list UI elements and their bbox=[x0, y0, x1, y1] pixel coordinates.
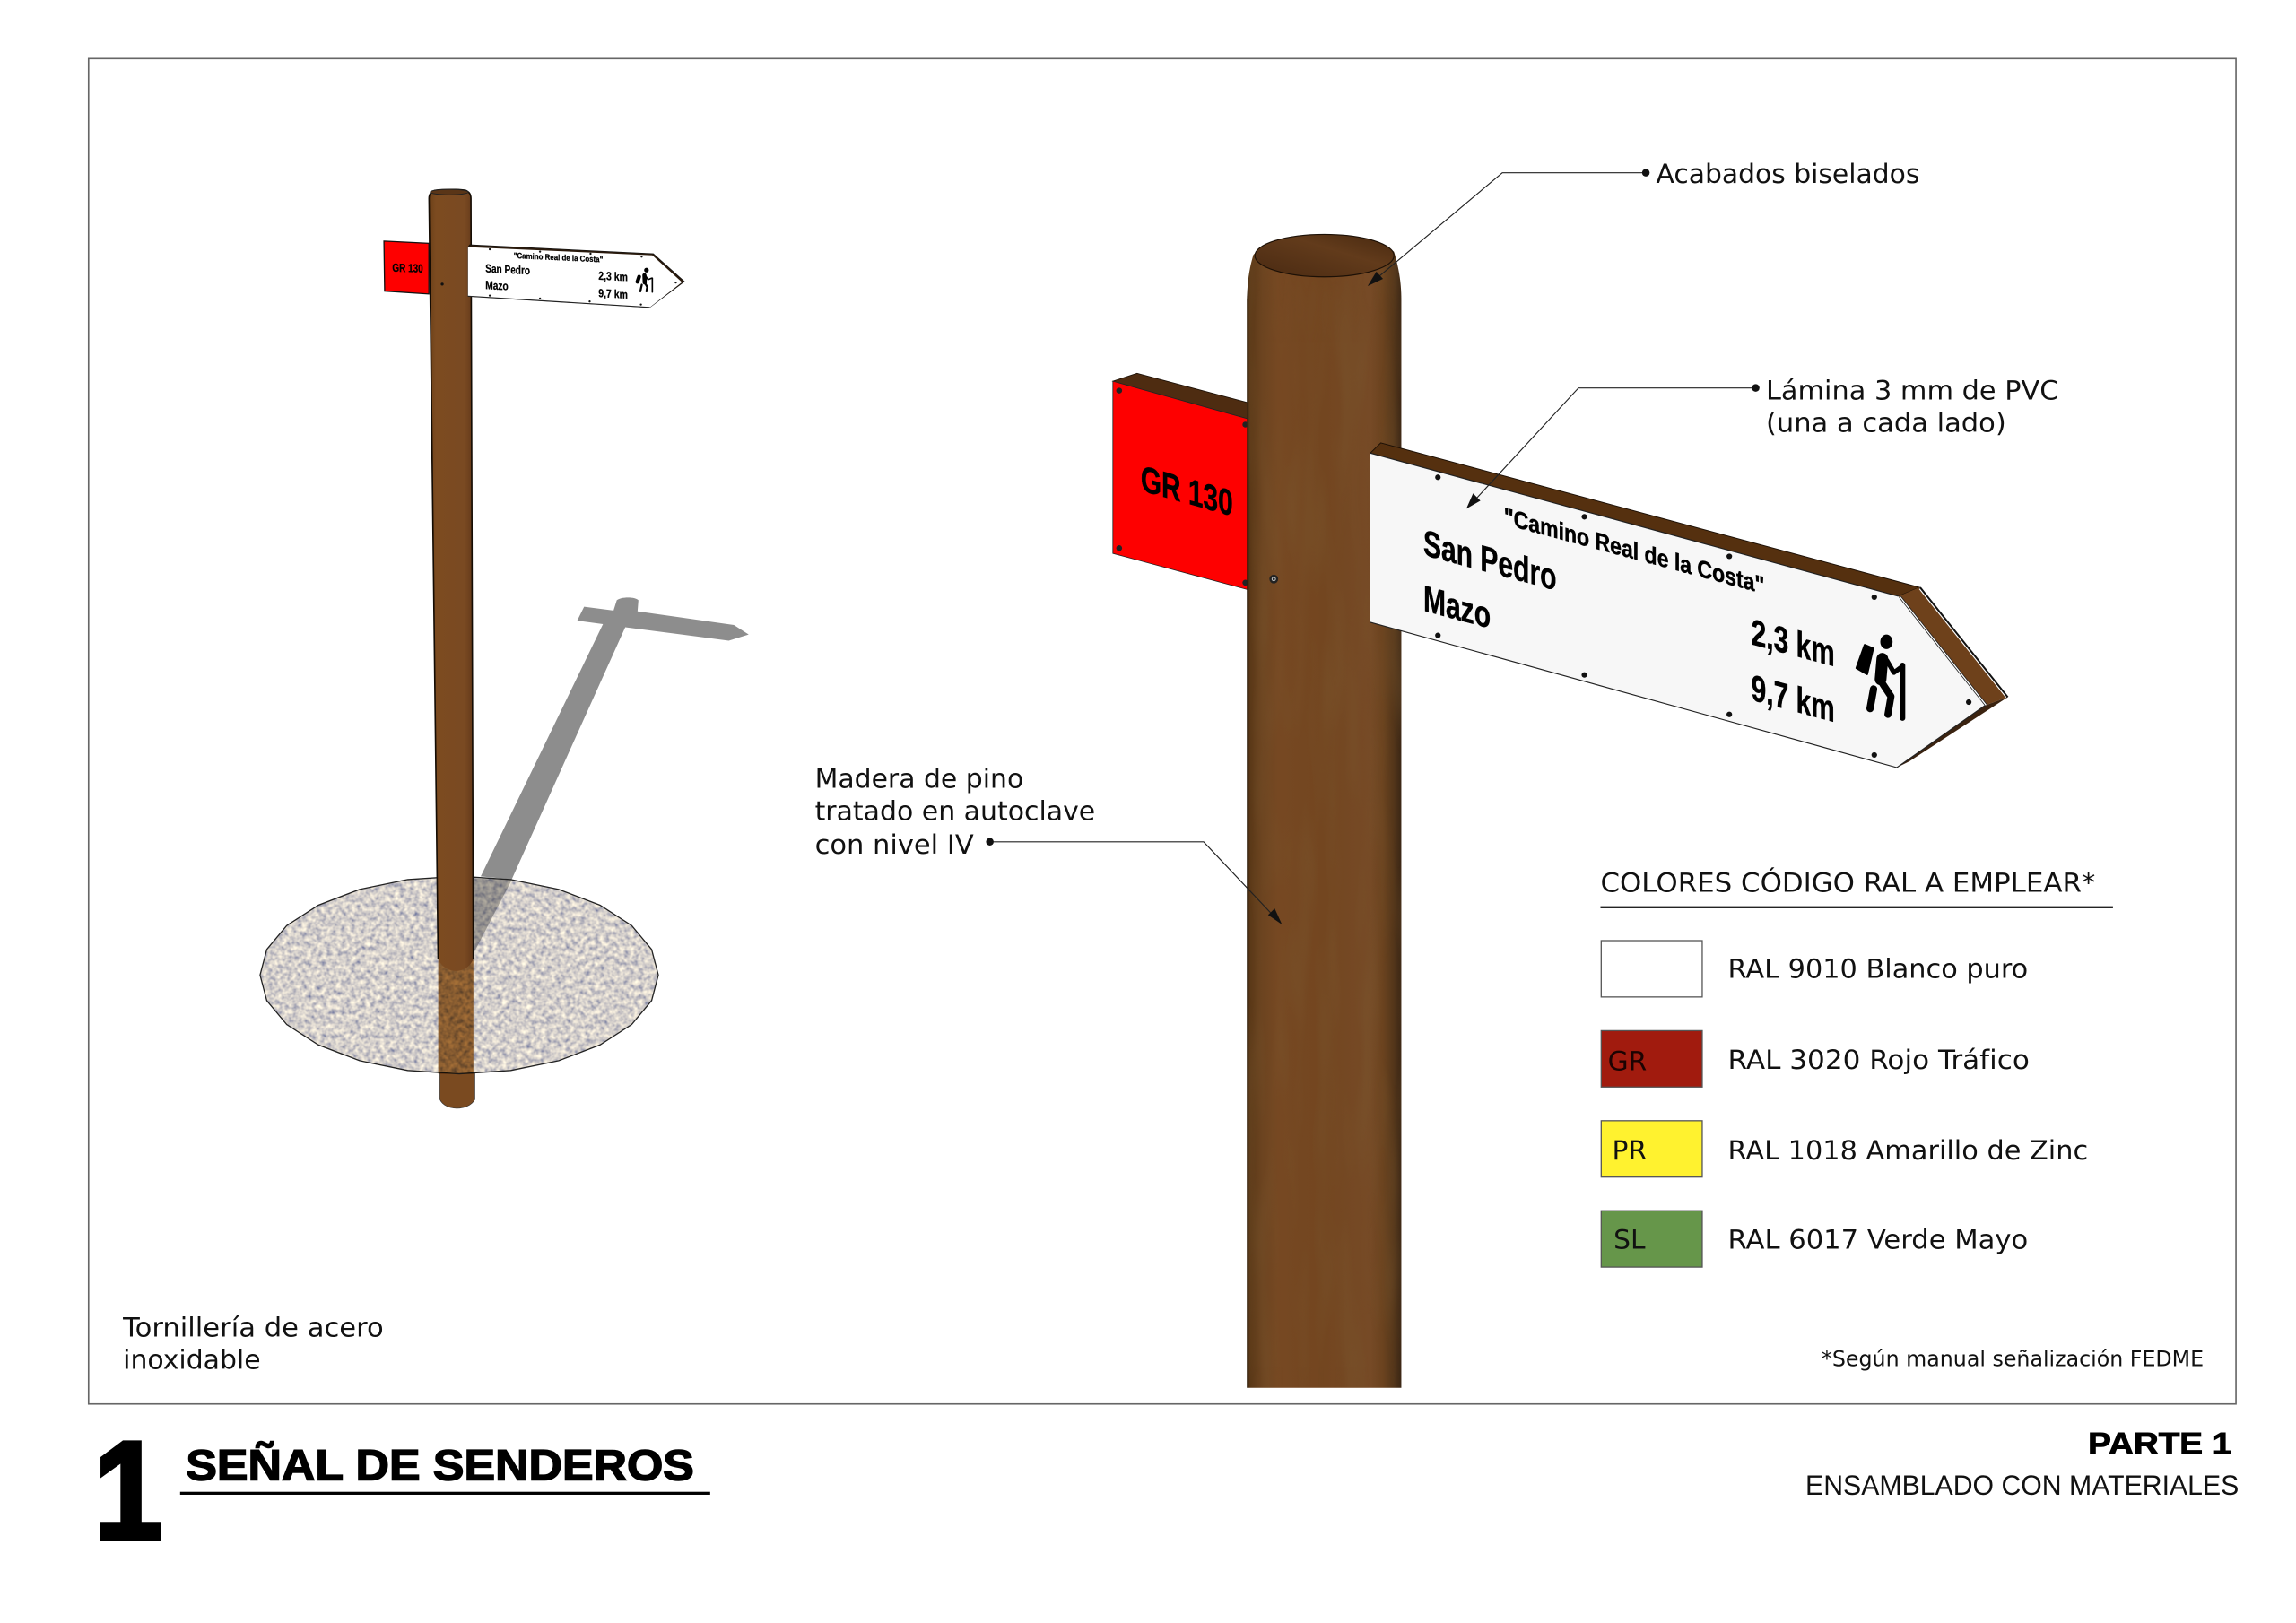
sign text bbox=[1423, 502, 1835, 730]
callout: treated pine bbox=[815, 763, 1282, 924]
cast shadow bbox=[481, 597, 749, 880]
page frame bbox=[89, 58, 2236, 1404]
callout: treated pine: con nivel IV bbox=[815, 829, 974, 861]
gravel base bbox=[259, 875, 659, 1074]
sign face bbox=[1370, 453, 1985, 768]
sign text: 2,3 km bbox=[1752, 611, 1835, 674]
icon: small hiker bbox=[638, 268, 652, 292]
small overview signpost bbox=[259, 189, 749, 1108]
screw bbox=[1269, 575, 1278, 584]
red GR plate: GR 130 bbox=[1141, 457, 1233, 525]
part label: ENSAMBLADO CON MATERIALES bbox=[1805, 1469, 2239, 1501]
callout: treated pine: Madera de pino bbox=[815, 763, 1023, 794]
swatch: yellow: RAL 1018 Amarillo de Zinc bbox=[1728, 1135, 2088, 1167]
swatch: green: RAL 6017 Verde Mayo bbox=[1728, 1225, 2028, 1256]
swatch: yellow: PR bbox=[1613, 1135, 1647, 1167]
note: stainless steel screws: Tornillería de acero bbox=[122, 1313, 384, 1344]
small direction sign: "Camino Real de la Costa" bbox=[514, 251, 603, 264]
legend: RAL colours bbox=[1600, 865, 2113, 1267]
swatch: green bbox=[1601, 1211, 2028, 1267]
sign text: San Pedro bbox=[1423, 521, 1557, 598]
swatch: red bbox=[1601, 1030, 2030, 1087]
swatch: green: SL bbox=[1613, 1225, 1646, 1256]
bevel edge bbox=[1899, 587, 2007, 706]
title: SEÑAL DE SENDEROS bbox=[186, 1442, 694, 1490]
post top bbox=[1255, 234, 1394, 277]
large detail signpost bbox=[1113, 231, 2007, 1389]
note: stainless steel screws: inoxidable bbox=[123, 1345, 261, 1376]
legend heading: COLORES CÓDIGO RAL A EMPLEAR* bbox=[1600, 865, 2095, 898]
buried post end bbox=[439, 1062, 474, 1108]
sign text: Mazo bbox=[1423, 577, 1491, 637]
shadow on gravel bbox=[472, 879, 512, 953]
part label bbox=[1805, 1427, 2239, 1501]
red GR plate bbox=[1113, 373, 1248, 589]
top edge bbox=[1370, 443, 1919, 596]
swatch: red: GR bbox=[1608, 1046, 1647, 1077]
small direction sign: 9,7 km bbox=[598, 286, 628, 301]
swatch: red: RAL 3020 Rojo Tráfico bbox=[1728, 1045, 2030, 1076]
note: stainless steel screws bbox=[122, 1313, 384, 1376]
footnote: *Según manual señalización FEDME bbox=[1822, 1346, 2204, 1371]
callout: PVC sheet bbox=[1466, 376, 2059, 508]
small red plate bbox=[384, 241, 429, 294]
post bbox=[429, 189, 474, 971]
small direction sign: 2,3 km bbox=[598, 269, 628, 283]
swatch: white: RAL 9010 Blanco puro bbox=[1728, 954, 2028, 985]
callout: bevelled finish: Acabados biselados bbox=[1657, 159, 1919, 190]
swatch: yellow bbox=[1601, 1121, 2088, 1177]
sign text: 9,7 km bbox=[1752, 666, 1835, 730]
lower edge bbox=[1897, 698, 2007, 768]
post top bbox=[430, 189, 468, 195]
icon: hiker bbox=[1857, 635, 1902, 718]
sign text: "Camino Real de la Costa" bbox=[1504, 502, 1764, 599]
part label: PARTE 1 bbox=[2088, 1427, 2231, 1461]
swatch: white bbox=[1601, 941, 2028, 997]
callout: PVC sheet: (una a cada lado) bbox=[1766, 408, 2006, 439]
wooden post bbox=[1246, 231, 1403, 1389]
direction sign bbox=[1370, 443, 2007, 768]
buried post section bbox=[439, 959, 474, 1073]
small direction sign: San Pedro bbox=[485, 262, 530, 277]
sheet number: 1 bbox=[94, 1413, 161, 1568]
callout: bevelled finish bbox=[1368, 159, 1919, 286]
small direction sign bbox=[440, 245, 684, 308]
small direction sign: Mazo bbox=[485, 278, 509, 293]
small red plate: GR 130 bbox=[392, 261, 423, 275]
callout: treated pine: tratado en autoclave bbox=[815, 795, 1095, 827]
callout: PVC sheet: Lámina 3 mm de PVC bbox=[1766, 376, 2059, 407]
